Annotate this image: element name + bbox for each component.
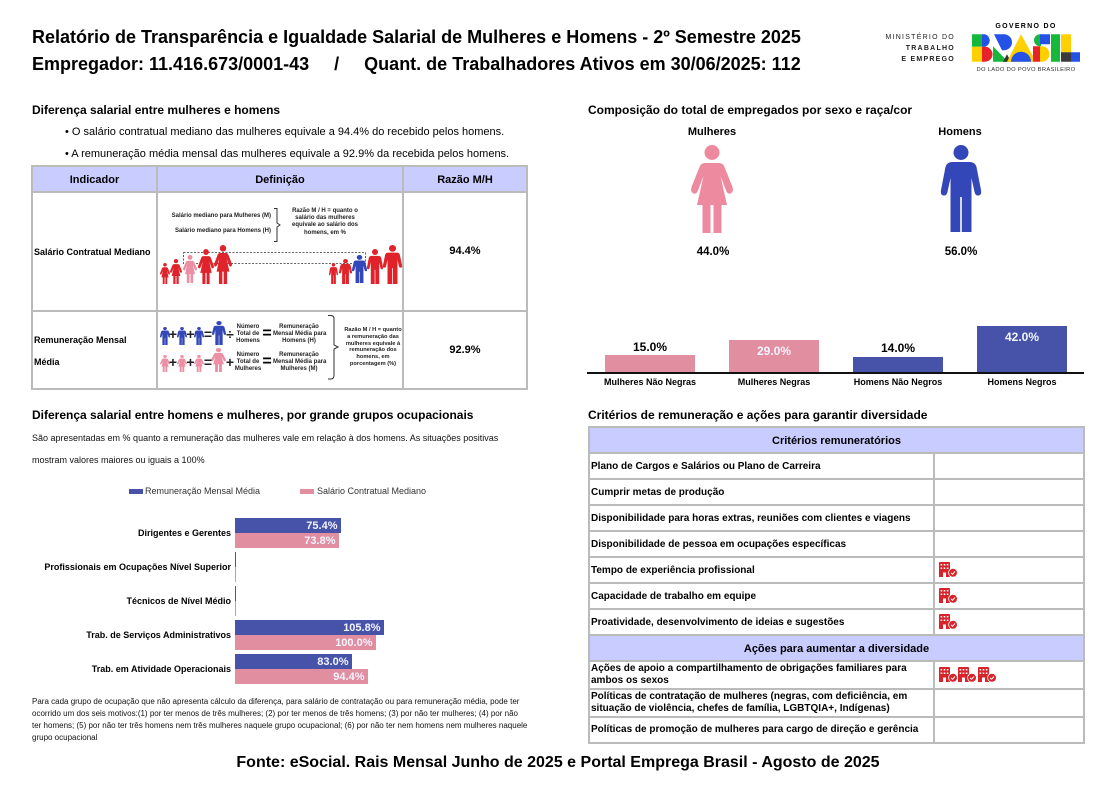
logo: Governo do Brasil: GOVERNO DO bbox=[995, 23, 1057, 30]
label: Homens Não Negros: Homens Não Negros bbox=[854, 377, 942, 387]
diagram: igual mulheres: = bbox=[262, 353, 272, 370]
header: Indicador bbox=[31, 165, 158, 193]
axis bbox=[587, 372, 1084, 374]
logo: Ministério do Trabalho e Emprego: TRABALHO bbox=[906, 45, 955, 52]
icons: equação mulheres: + bbox=[186, 354, 195, 370]
bar: Mulheres Negras bbox=[729, 340, 819, 372]
diagram: remuneração homens: Mensal Média para bbox=[273, 331, 326, 337]
value: 14.0%: 14.0% bbox=[881, 341, 915, 355]
value: 56.0%: 56.0% bbox=[945, 246, 977, 258]
text block: bullets: • O salário contratual mediano das mulheres equivale a 94.4% do recebido pelos homens. bbox=[65, 126, 504, 138]
bar: Homens Negros: 42.0% bbox=[1005, 330, 1039, 344]
header: Critérios remuneratórios: Critérios remuneratórios bbox=[772, 435, 901, 447]
row: Disponibilidade para horas extras, reuniões com clientes e viagens bbox=[591, 513, 911, 524]
diagram: razão text 2: remuneração dos bbox=[349, 347, 397, 353]
text block: nota: Para cada grupo de ocupação que não apresenta cálculo da diferença, para salário de contratação ou para remuneração média, pode ter bbox=[32, 697, 519, 706]
text block: bullets bbox=[65, 126, 509, 160]
row 2 value bbox=[402, 310, 528, 390]
row bbox=[588, 688, 935, 718]
legend: swatch rosa bbox=[300, 489, 314, 494]
label: Homens Negros: Homens Negros bbox=[987, 377, 1057, 387]
cell bbox=[933, 688, 1085, 718]
bar: Mulheres Negras: 29.0% bbox=[757, 344, 791, 358]
diagram: razão text 1: equivale ao salário dos bbox=[292, 222, 358, 228]
bar stub bbox=[234, 586, 236, 601]
bar: 105.8% bbox=[235, 620, 384, 635]
logo: Ministério do Trabalho e Emprego: MINISTÉRIO DO bbox=[885, 34, 955, 41]
row bbox=[588, 716, 935, 744]
diagram: remuneração mulheres: Mulheres (M) bbox=[280, 366, 318, 372]
diagram: brace 1 bbox=[274, 208, 281, 242]
row bbox=[588, 452, 935, 480]
heading: critérios: Critérios de remuneração e ações para garantir diversidade bbox=[588, 408, 927, 422]
diagram: salário mediano labels: Salário mediano para Homens (H) bbox=[175, 228, 271, 234]
row 1 definition bbox=[156, 191, 404, 312]
icons: equação mulheres: = bbox=[204, 354, 212, 370]
label: Dirigentes: Dirigentes e Gerentes bbox=[138, 528, 231, 538]
cell with icon bbox=[933, 608, 1085, 636]
cell bbox=[933, 716, 1085, 744]
label: Homens: Homens bbox=[938, 126, 982, 138]
diagram: razão text 2: homens, em bbox=[356, 354, 390, 360]
icons: equação homens: = bbox=[204, 326, 212, 342]
cell with icon bbox=[933, 556, 1085, 584]
logo: Ministério do Trabalho e Emprego: E EMPREGO bbox=[901, 56, 955, 63]
diagram: remuneração homens: Homens (H) bbox=[282, 338, 316, 344]
diagram: brace 2 bbox=[328, 315, 339, 380]
row: Disponibilidade de pessoa em ocupações específicas bbox=[591, 539, 846, 550]
logo: Governo do Brasil bbox=[972, 23, 1080, 73]
diagram: número total mulheres: Mulheres bbox=[235, 366, 261, 372]
cell bbox=[933, 530, 1085, 558]
bar: 83.0%: 83.0% bbox=[317, 656, 348, 668]
text block: explicação: mostram valores maiores ou iguais a 100% bbox=[32, 455, 205, 465]
icons: equação mulheres: + bbox=[226, 354, 234, 370]
header: Definição: Definição bbox=[255, 174, 305, 186]
row bbox=[588, 504, 935, 532]
bar: 75.4% bbox=[235, 518, 341, 533]
row 2 definition bbox=[156, 310, 404, 390]
diagram: razão text 1: salário das mulheres bbox=[295, 215, 355, 221]
row bbox=[588, 608, 935, 636]
row: Tempo de experiência profissional bbox=[591, 565, 755, 576]
value: 44.0%: 44.0% bbox=[697, 246, 729, 258]
icons: equação mulheres: + bbox=[169, 354, 177, 370]
bar: 105.8%: 105.8% bbox=[343, 622, 380, 634]
row: situação de violência, chefes de família, LGBTQIA+, Indígenas) bbox=[591, 703, 890, 714]
row 2 indicator bbox=[31, 310, 158, 390]
diagram: razão text 1 bbox=[292, 208, 358, 236]
label: Profissionais: Profissionais em Ocupações Nível Superior bbox=[44, 562, 231, 572]
diagram: remuneração mulheres: Remuneração bbox=[279, 352, 319, 358]
bar: 100.0% bbox=[235, 635, 376, 650]
diagram: razão text 1: homens, em % bbox=[304, 230, 346, 236]
cell with icons bbox=[933, 660, 1085, 690]
bar: 73.8% bbox=[235, 533, 339, 548]
header: Ações: Ações para aumentar a diversidade bbox=[744, 643, 929, 655]
header: Indicador: Indicador bbox=[70, 174, 119, 186]
diagram: razão text 2: a remuneração das bbox=[347, 334, 399, 340]
bar: 73.8%: 73.8% bbox=[304, 535, 336, 547]
diagram: salário mediano labels bbox=[172, 212, 271, 234]
diagram: remuneração mulheres bbox=[273, 352, 326, 372]
label: Técnicos: Técnicos de Nível Médio bbox=[126, 596, 231, 606]
diagram: razão text 2: mulheres equivale à bbox=[346, 341, 400, 347]
row: ambos os sexos bbox=[591, 675, 669, 686]
diagram: razão text 2: porcentagem (%) bbox=[350, 361, 396, 367]
text block: explicação: São apresentadas em % quanto a remuneração das mulheres vale em relação à dos homens. As situações positivas bbox=[32, 433, 498, 443]
pictograma: homens bbox=[938, 126, 982, 258]
cell bbox=[933, 504, 1085, 532]
row 1 value bbox=[402, 191, 528, 312]
bar stub bbox=[234, 567, 236, 582]
heading: composição: Composição do total de empregados por sexo e raça/cor bbox=[588, 103, 912, 117]
row: Proatividade, desenvolvimento de ideias e sugestões bbox=[591, 617, 844, 628]
legend: swatch azul bbox=[129, 489, 143, 494]
bar: 100.0%: 100.0% bbox=[335, 637, 372, 649]
text block: nota: grupo ocupacional bbox=[32, 733, 97, 742]
diagram: número total mulheres bbox=[235, 352, 261, 372]
title: Relatório de Transparência e Igualdade Salarial de Mulheres e Homens - 2º Semestre 2025 bbox=[32, 27, 801, 47]
panel: tabela de indicadores bbox=[31, 165, 528, 390]
icons: equação homens: + bbox=[186, 326, 195, 342]
cell bbox=[933, 452, 1085, 480]
diagram: número total homens: Número bbox=[237, 324, 259, 330]
bar: 94.4%: 94.4% bbox=[333, 671, 364, 683]
logo: Ministério do Trabalho e Emprego bbox=[885, 32, 955, 63]
header: Definição bbox=[156, 165, 404, 193]
diagram: número total mulheres: Total de bbox=[237, 359, 259, 365]
icon: homem bbox=[940, 145, 982, 232]
row: Ações de apoio a compartilhamento de obrigações familiares para bbox=[591, 663, 907, 674]
diagram: razão text 2: Razão M / H = quanto bbox=[344, 327, 402, 333]
panel: tabela de critérios bbox=[588, 426, 1085, 744]
cell bbox=[933, 478, 1085, 506]
icons: homens por salário bbox=[329, 245, 402, 284]
row: Plano de Cargos e Salários ou Plano de Carreira bbox=[591, 461, 821, 472]
diagram: dashed median box bbox=[183, 252, 366, 264]
diagram: número total homens: Homens bbox=[236, 338, 260, 344]
row bbox=[588, 530, 935, 558]
bar: 83.0% bbox=[235, 654, 352, 669]
row bbox=[588, 556, 935, 584]
header: Razão M/H: Razão M/H bbox=[437, 174, 493, 186]
bar: Homens Não Negros bbox=[853, 357, 943, 372]
row bbox=[588, 478, 935, 506]
icons: mulheres por salário bbox=[160, 245, 232, 284]
legend bbox=[129, 486, 426, 496]
diagram: remuneração mulheres: Mensal Média para bbox=[273, 359, 326, 365]
title bbox=[32, 27, 801, 74]
text block: bullets: • A remuneração média mensal das mulheres equivale a 92.9% da recebida pelos homens. bbox=[65, 148, 509, 160]
row 1 indicator: Salário Contratual Mediano bbox=[34, 247, 151, 257]
icons: equação homens: + bbox=[169, 326, 177, 342]
title: Empregador: 11.416.673/0001-43 / Quant. de Trabalhadores Ativos em 30/06/2025: 112 bbox=[32, 54, 801, 74]
bar stub bbox=[234, 601, 236, 616]
label: Mulheres Não Negras: Mulheres Não Negras bbox=[604, 377, 696, 387]
diagram: remuneração homens bbox=[273, 324, 326, 344]
row 1 indicator bbox=[31, 191, 158, 312]
row: Políticas de contratação de mulheres (negras, com deficiência, em bbox=[591, 691, 907, 702]
text block: nota: ocorrido um dos seis motivos:(1) por ter menos de três mulheres; (2) por ter menos de três homens; (3) por não ter mulheres; (4) por não bbox=[32, 709, 518, 718]
icons: equação mulheres bbox=[160, 348, 234, 372]
row 2 indicator: Média bbox=[34, 357, 60, 367]
diagram: razão text 1: Razão M / H = quanto o bbox=[292, 208, 358, 214]
chart: grupos ocupacionais bbox=[44, 518, 384, 684]
cell with icon bbox=[933, 582, 1085, 610]
legend: Salário: Salário Contratual Mediano bbox=[317, 486, 426, 496]
header: Critérios remuneratórios bbox=[588, 426, 1085, 454]
icons: equação homens bbox=[160, 321, 234, 345]
label: Serviços: Trab. de Serviços Administrativos bbox=[86, 630, 231, 640]
bar stub bbox=[234, 552, 236, 567]
label: Mulheres: Mulheres bbox=[688, 126, 736, 138]
chart: raça/cor bbox=[587, 326, 1084, 387]
icon: mulher bbox=[691, 145, 733, 233]
heading: diferença salarial: Diferença salarial entre mulheres e homens bbox=[32, 103, 280, 117]
row bbox=[588, 660, 935, 690]
diagram: remuneração homens: Remuneração bbox=[279, 324, 319, 330]
text block: explicação bbox=[32, 433, 498, 465]
header: Ações bbox=[588, 634, 1085, 662]
legend: Remuneração: Remuneração Mensal Média bbox=[145, 486, 260, 496]
text block: nota bbox=[32, 697, 527, 742]
heading: grupos ocupacionais: Diferença salarial entre homens e mulheres, por grande grupos ocupacionais bbox=[32, 408, 473, 422]
header: Razão M/H bbox=[402, 165, 528, 193]
diagram: salário mediano labels: Salário mediano para Mulheres (M) bbox=[172, 213, 271, 219]
logo: Governo do Brasil: DO LADO DO POVO BRASILEIRO bbox=[977, 67, 1075, 73]
diagram: número total mulheres: Número bbox=[237, 352, 259, 358]
row 1 value: 94.4% bbox=[449, 245, 481, 257]
label: Mulheres Negras: Mulheres Negras bbox=[738, 377, 810, 387]
row 2 indicator: Remuneração Mensal bbox=[34, 335, 127, 345]
row bbox=[588, 582, 935, 610]
icons: equação homens: ÷ bbox=[226, 326, 234, 342]
row: Políticas de promoção de mulheres para cargo de direção e gerência bbox=[591, 724, 918, 735]
bar: Mulheres Não Negras bbox=[605, 355, 695, 372]
diagram: igual homens: = bbox=[262, 325, 272, 342]
text block: nota: ter homens; (5) por não ter três homens nem três mulheres naquele grupo ocupacional; (6) por não ter nem homens nem mulheres naquele bbox=[32, 721, 527, 730]
label: Operacionais: Trab. em Atividade Operacionais bbox=[92, 664, 231, 674]
row 2 value: 92.9% bbox=[449, 344, 481, 356]
row: Cumprir metas de produção bbox=[591, 487, 724, 498]
bar: 94.4% bbox=[235, 669, 368, 684]
bar: 75.4%: 75.4% bbox=[306, 520, 338, 532]
diagram: número total homens bbox=[236, 324, 260, 344]
row: Capacidade de trabalho em equipe bbox=[591, 591, 756, 602]
fonte: Fonte: eSocial. Rais Mensal Junho de 2025 e Portal Emprega Brasil - Agosto de 2025 bbox=[236, 754, 880, 771]
diagram: razão text 2 bbox=[344, 327, 402, 367]
diagram: número total homens: Total de bbox=[237, 331, 259, 337]
pictograma: mulheres bbox=[688, 126, 736, 258]
value: 15.0%: 15.0% bbox=[633, 340, 667, 354]
bar: Homens Negros bbox=[977, 326, 1067, 372]
